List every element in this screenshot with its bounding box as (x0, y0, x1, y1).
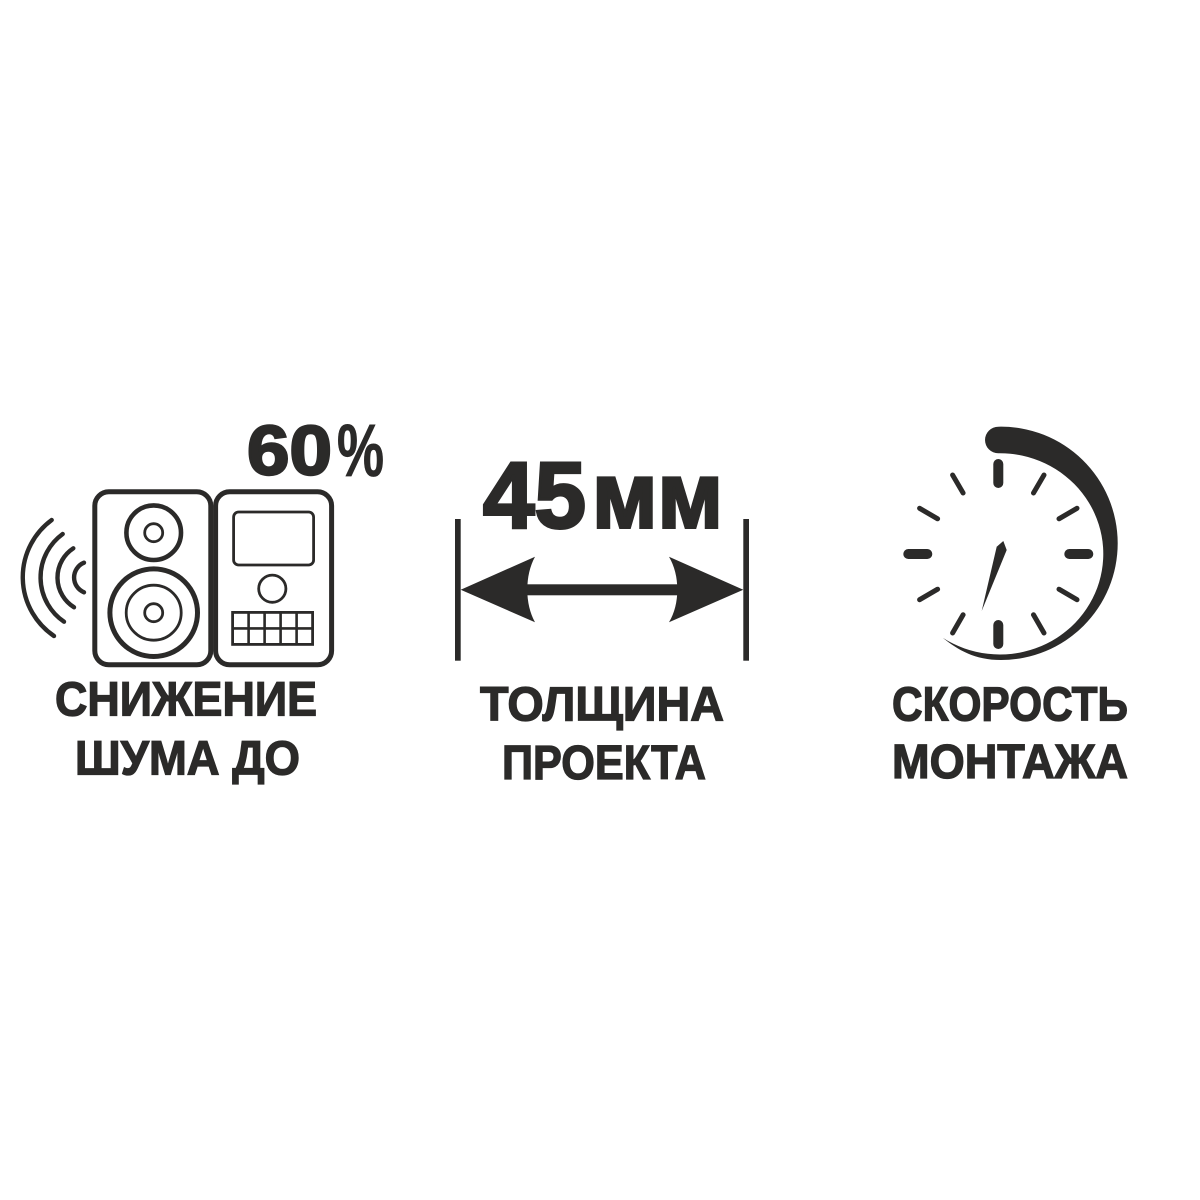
panel: noise reduction (23, 409, 384, 786)
label: noise reduction (55, 672, 317, 786)
value: 60%: 60 (247, 412, 332, 490)
label: project thickness: ПРОЕКТА (502, 736, 706, 790)
icon: stopwatch sweep arc (943, 427, 1118, 660)
value: 45 mm: 45 (483, 442, 586, 548)
icon: stereo unit (216, 492, 332, 665)
label: noise reduction: СНИЖЕНИЕ (55, 672, 317, 726)
value: 45 mm (483, 442, 723, 548)
icon: sound waves (23, 520, 84, 636)
label: noise reduction: ШУМА ДО (75, 732, 300, 786)
value: 60%: % (337, 409, 384, 492)
label: installation speed: МОНТАЖА (892, 735, 1128, 789)
label: installation speed: СКОРОСТЬ (892, 678, 1128, 732)
label: installation speed (892, 678, 1128, 789)
value: 60% (247, 409, 384, 492)
label: project thickness (480, 678, 724, 790)
icon: speaker (95, 492, 211, 665)
icon: dimension arrow (455, 519, 749, 661)
panel: project thickness (455, 442, 749, 790)
panel: installation speed (892, 427, 1128, 789)
label: project thickness: ТОЛЩИНА (480, 678, 724, 732)
value: 45 mm: мм (592, 442, 723, 548)
icon: clock hand (982, 541, 1007, 611)
icon: clock ticks (908, 464, 1088, 644)
